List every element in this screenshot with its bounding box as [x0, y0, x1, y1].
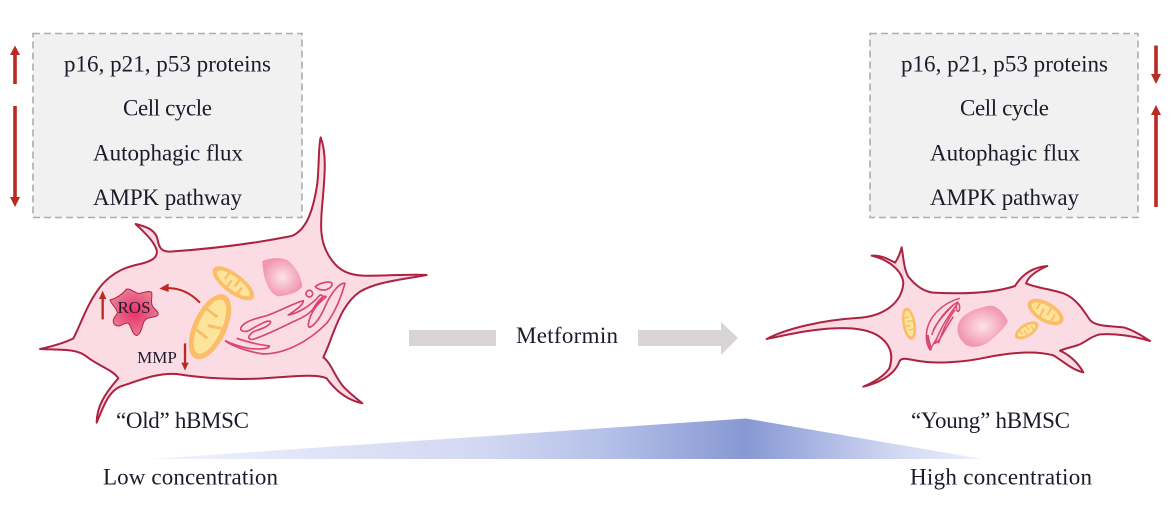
label: young hBMSC: “Young” hBMSC	[911, 408, 1070, 433]
label: cell cycle: Cell cycle	[123, 96, 212, 120]
arrow: metformin left bar	[409, 330, 496, 346]
label: autophagic flux young: Autophagic flux	[930, 140, 1080, 166]
cell body outline	[40, 137, 427, 423]
old hBMSC cell	[40, 137, 427, 423]
golgi young	[926, 298, 960, 350]
label: AMPK pathway young: AMPK pathway	[930, 185, 1080, 210]
arrow: young up	[1151, 105, 1161, 207]
label: MMP: MMP	[137, 348, 177, 367]
label: p16, p21, p53 proteins young: p16, p21, p53 proteins	[901, 52, 1108, 76]
ROS star	[110, 289, 158, 336]
nucleus young	[957, 306, 1008, 347]
golgi old	[225, 282, 345, 354]
arrow: old down	[10, 106, 20, 207]
label: ROS: ROS	[117, 298, 151, 317]
mitochondrion small	[207, 260, 259, 306]
arrow: ROS up	[99, 291, 106, 319]
mitochondrion left	[900, 306, 918, 341]
arrow: young down	[1151, 46, 1161, 84]
mitochondrion lower right	[1012, 318, 1042, 343]
young hBMSC cell	[767, 247, 1150, 387]
label: p16, p21, p53 proteins: p16, p21, p53 proteins	[64, 52, 271, 76]
cell body outline young	[767, 247, 1150, 387]
label: AMPK pathway: AMPK pathway	[93, 185, 242, 210]
arrow: curved mito to ROS	[159, 283, 200, 303]
arrow: metformin right	[638, 322, 738, 355]
mitochondrion large	[180, 288, 240, 365]
label: Metformin: Metformin	[516, 323, 618, 348]
label: cell cycle young: Cell cycle	[960, 96, 1049, 120]
label: low concentration: Low concentration	[103, 464, 278, 490]
arrow: MMP down	[181, 343, 189, 371]
panel: young cell markers	[870, 34, 1138, 218]
nucleus	[262, 258, 302, 296]
organelles young	[900, 293, 1068, 350]
label: old hBMSC: “Old” hBMSC	[116, 408, 249, 433]
label: autophagic flux: Autophagic flux	[93, 140, 244, 166]
concentration gradient triangle	[150, 418, 982, 459]
arrow: old up	[10, 46, 20, 84]
mitochondrion upper right	[1023, 293, 1068, 331]
label: high concentration: High concentration	[910, 464, 1092, 490]
panel: old cell markers	[33, 34, 302, 218]
